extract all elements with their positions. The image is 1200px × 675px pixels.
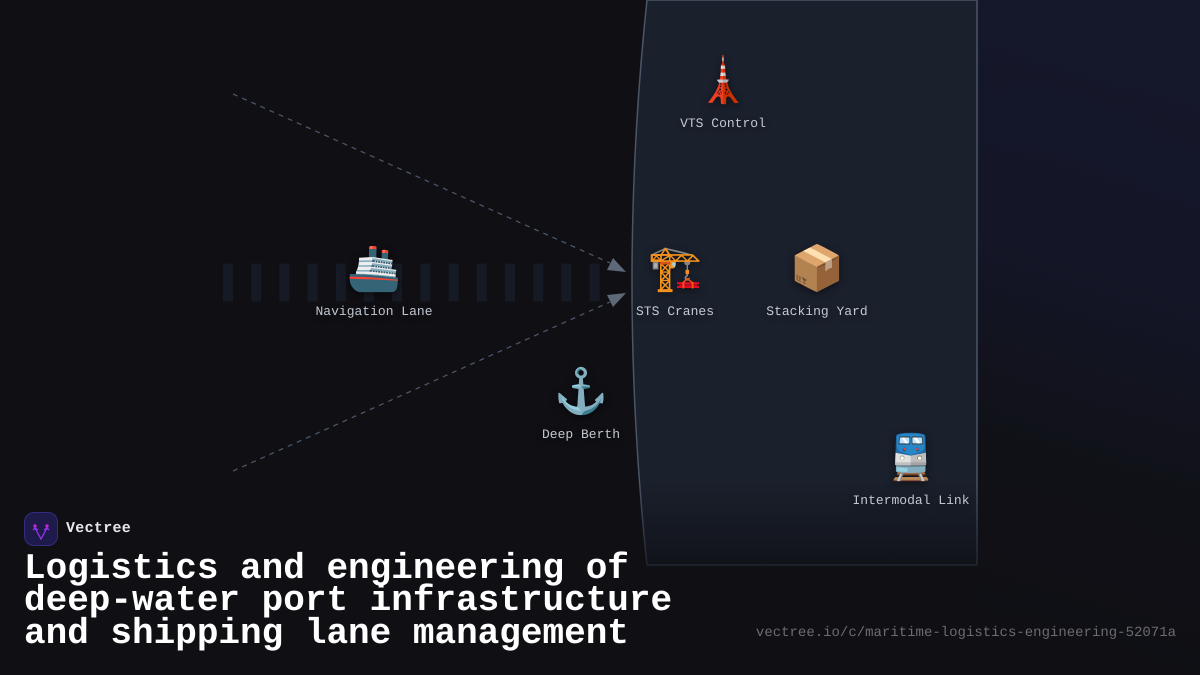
- arrow: lower approach route: [233, 293, 626, 471]
- title: and shipping lane management: [24, 613, 629, 654]
- node: Intermodal Link: 🚆: [884, 431, 938, 483]
- node: VTS Control: 🗼: [696, 54, 750, 106]
- node: Stacking Yard: Stacking Yard: [766, 304, 868, 319]
- brand name: Vectree: [66, 520, 131, 537]
- title: [24, 548, 672, 654]
- node: Stacking Yard: 📦: [790, 242, 844, 294]
- navigation lane dashes: [223, 264, 601, 302]
- arrow: upper approach route: [233, 94, 626, 272]
- node: Deep Berth: [542, 365, 620, 442]
- source url: vectree.io/c/maritime-logistics-engineering-52071a: [756, 625, 1176, 641]
- node: Navigation Lane: [315, 242, 433, 319]
- node: Navigation Lane: Navigation Lane: [315, 304, 433, 319]
- title: Logistics and engineering of: [24, 548, 629, 589]
- node: STS Cranes: [636, 242, 714, 319]
- icon: vectree mark: [32, 524, 50, 540]
- node: Navigation Lane: 🚢: [347, 242, 401, 294]
- node: Intermodal Link: Intermodal Link: [852, 493, 970, 508]
- node: VTS Control: [680, 54, 766, 131]
- node: Stacking Yard: [766, 242, 868, 319]
- logo badge: [24, 512, 58, 546]
- node: STS Cranes: 🏗️: [648, 242, 702, 294]
- node: VTS Control: VTS Control: [680, 116, 766, 131]
- right side tint: [977, 0, 1200, 675]
- title: deep-water port infrastructure: [24, 580, 672, 621]
- node: Deep Berth: ⚓: [554, 365, 608, 417]
- node: Deep Berth: Deep Berth: [542, 427, 620, 442]
- panel: terminal land area: [632, 0, 977, 565]
- node: STS Cranes: STS Cranes: [636, 304, 714, 319]
- node: Intermodal Link: [852, 431, 970, 508]
